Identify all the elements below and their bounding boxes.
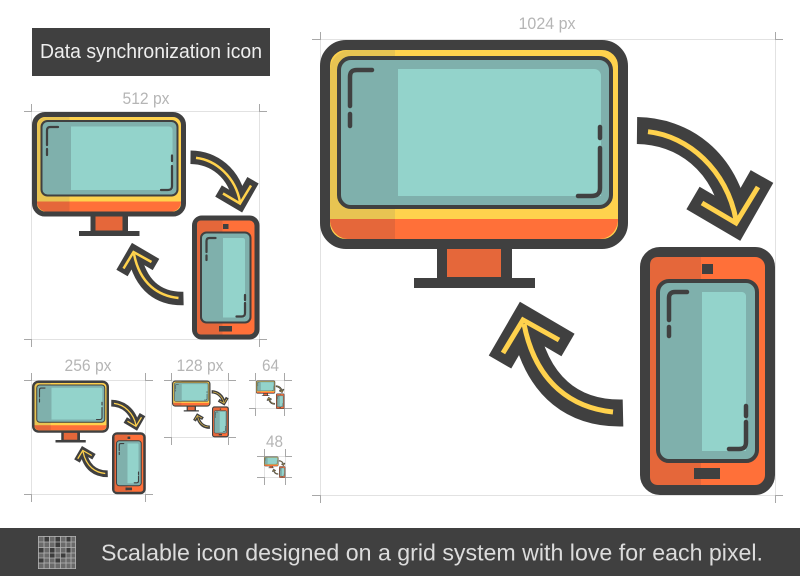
title badge <box>32 28 270 76</box>
grid guides: 48 px <box>257 449 292 485</box>
size label: 1024 px: 1024 px <box>518 15 576 33</box>
size label: 48: 48 <box>266 433 283 451</box>
icon preview: 64 px <box>256 381 284 409</box>
size label: 64: 64 <box>262 357 279 375</box>
icon preview: 48 px <box>264 457 285 478</box>
phone <box>645 252 770 490</box>
grid guides: 128 px <box>164 373 236 445</box>
arrow: phone to monitor <box>500 320 623 413</box>
size label: 256 px: 256 px <box>64 357 112 375</box>
footer bar <box>0 528 800 576</box>
size label: 128 px: 128 px <box>176 357 224 375</box>
main icon: data synchronization 1024 px <box>325 45 770 490</box>
footer tagline: Scalable icon designed on a grid system with love for each pixel. <box>101 540 763 566</box>
size label: 512 px: 512 px <box>122 90 170 108</box>
title badge: Data synchronization icon <box>40 40 262 63</box>
icon preview: 512 px <box>34 114 257 337</box>
monitor <box>325 45 623 288</box>
icon: pixel grid <box>38 536 76 569</box>
icon preview: 128 px <box>173 381 228 437</box>
grid guides: 512 px <box>24 104 267 347</box>
arrow: monitor to phone <box>637 130 762 223</box>
icon preview: 256 px <box>33 382 144 493</box>
grid guides: 64 px <box>249 373 292 416</box>
grid guides: 1024 px <box>312 32 783 503</box>
grid guides: 256 px <box>24 373 153 502</box>
